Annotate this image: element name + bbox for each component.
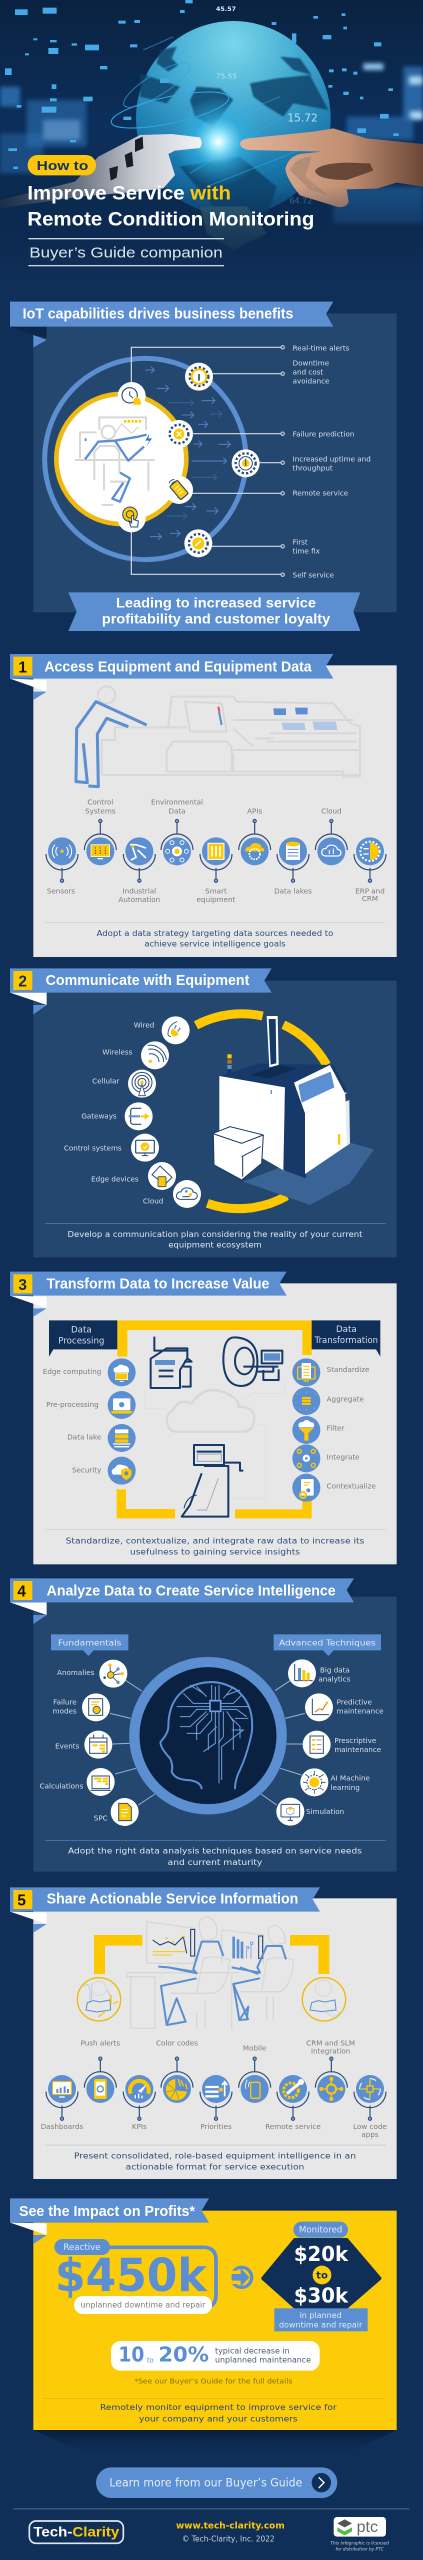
icon: data lakes	[277, 837, 309, 882]
heading	[10, 1578, 354, 1602]
left labels: Security	[72, 1466, 102, 1475]
stat: 10 to 20 percent	[111, 2341, 320, 2371]
yellow brackets	[94, 1935, 329, 1974]
caption: Develop a communication plan considering the reality of your current	[67, 1229, 363, 1239]
caption: Present consolidated, role-based equipment intelligence in an	[74, 2150, 356, 2160]
stat: 10 to 20 percent: to	[147, 2356, 154, 2364]
left labels: Data lake	[67, 1433, 102, 1442]
icon: wireless	[141, 1041, 169, 1069]
caption: Adopt a data strategy targeting data sources needed to	[97, 928, 333, 938]
footer website and copyright	[176, 2522, 285, 2544]
data source labels: Control	[87, 798, 113, 807]
subtitle: Buyer’s Guide companion	[29, 245, 223, 261]
heading	[10, 1887, 320, 1912]
icon: calculations	[87, 1768, 115, 1796]
icon: self service touch	[118, 504, 146, 532]
connection labels: Wired	[134, 1021, 154, 1030]
info labels	[41, 2039, 387, 2139]
caption: Remotely monitor equipment to improve service for	[100, 2402, 337, 2412]
icon: APIs	[239, 819, 271, 865]
logo: Tech-Clarity: Tech-Clarity	[33, 2524, 120, 2540]
icon: priorities	[200, 2075, 232, 2120]
fundamentals tag: Fundamentals	[58, 1637, 121, 1647]
data source labels: Smart	[205, 887, 227, 896]
icon: uptime gear	[232, 449, 260, 477]
hero title block	[27, 155, 314, 266]
equipment machine	[213, 1016, 374, 1205]
conclusion banner	[68, 592, 360, 631]
benefit labels: time fix	[293, 546, 320, 555]
equipment illustration	[76, 686, 361, 787]
right technique labels: maintenance	[337, 1707, 384, 1716]
right labels: Filter	[327, 1423, 344, 1432]
data source labels: Data lakes	[274, 887, 312, 896]
data values: 15.72	[287, 111, 318, 124]
icon: SPC	[111, 1798, 139, 1826]
call to action button: Learn more from our Buyer’s Guide	[109, 2475, 302, 2489]
heading: 2	[18, 974, 27, 991]
icon: AI machine learning	[300, 1768, 328, 1796]
call to action button	[96, 2467, 337, 2498]
left technique labels: Events	[55, 1742, 80, 1751]
icon: first time fix gear	[184, 529, 212, 557]
benefit labels: avoidance	[293, 377, 330, 386]
data source labels: Data	[168, 806, 186, 815]
icon: wired	[162, 1016, 190, 1044]
left labels	[43, 1367, 102, 1475]
right technique labels: maintenance	[334, 1745, 382, 1754]
outer ring	[45, 358, 246, 560]
faint arrows	[167, 399, 222, 519]
icon: edge computing	[108, 1358, 136, 1386]
connection labels: Control systems	[64, 1143, 122, 1152]
how to pill	[28, 155, 96, 175]
icon: filter	[292, 1416, 320, 1444]
license note: for distribution by PTC	[335, 2546, 384, 2552]
license note: This infographic is licensed	[330, 2540, 389, 2546]
icon: events	[84, 1731, 112, 1759]
right labels: Standardize	[327, 1365, 370, 1374]
reactive cost: Reactive	[63, 2243, 101, 2253]
heading: 3	[18, 1277, 27, 1294]
icon: predictive maintenance	[305, 1693, 333, 1721]
advanced techniques tag	[274, 1634, 381, 1656]
icon: remote service phone	[165, 476, 193, 504]
icon: dashboards	[46, 2075, 78, 2120]
fundamentals tag	[51, 1634, 128, 1656]
panel: section 3 transform data	[10, 1272, 397, 1564]
stat: 10 to 20 percent: typical decrease in	[215, 2347, 290, 2356]
monitored cost	[263, 2222, 379, 2331]
panel shadow	[33, 2430, 397, 2460]
heading: Access Equipment and Equipment Data	[44, 660, 312, 676]
icon: ERP and CRM	[354, 837, 386, 882]
connection labels: Gateways	[81, 1111, 117, 1120]
mobile hand bubble	[302, 1978, 346, 2021]
monitored cost: Monitored	[299, 2225, 342, 2235]
icon: sensors	[46, 837, 78, 882]
icon: anomalies	[99, 1660, 127, 1688]
info labels: integration	[311, 2046, 350, 2055]
data values: 75.55	[216, 71, 237, 80]
main title: Remote Condition Monitoring	[27, 210, 314, 231]
monitored cost: $30k	[294, 2283, 349, 2307]
benefit labels: throughput	[293, 463, 333, 472]
heading: 5	[17, 1892, 26, 1909]
benefit labels: Self service	[293, 570, 335, 579]
heading	[10, 654, 333, 679]
monitored cost: downtime and repair	[279, 2321, 363, 2330]
left technique labels	[40, 1668, 108, 1823]
monitored cost: $20k	[294, 2242, 349, 2266]
right labels: Integrate	[327, 1453, 360, 1462]
benefit labels	[293, 343, 371, 579]
data transformation label: Transformation	[314, 1336, 378, 1346]
panel: section 4 analyze data	[10, 1578, 397, 1872]
icon: control systems	[84, 819, 116, 865]
info labels: apps	[361, 2130, 379, 2139]
panel: section 5 share information	[10, 1887, 397, 2179]
main title: Improve Service with	[27, 183, 231, 204]
left technique labels: Calculations	[40, 1782, 84, 1791]
panel: section 1 access equipment	[10, 654, 397, 957]
icon: downtime gear	[185, 363, 213, 391]
icon: mobile	[239, 2057, 271, 2103]
caption: actionable format for service execution	[126, 2162, 304, 2172]
icon: smart equipment	[200, 837, 232, 882]
info labels: Dashboards	[41, 2122, 84, 2131]
right technique labels: Simulation	[306, 1807, 344, 1816]
stat: 10 to 20 percent: 20%	[158, 2343, 209, 2367]
heading: IoT capabilities drives business benefits	[23, 307, 293, 323]
data source labels: Automation	[118, 895, 160, 904]
icon: simulation	[276, 1798, 304, 1826]
benefit labels: and cost	[293, 368, 323, 377]
how to pill: How to	[37, 159, 89, 173]
caption	[68, 1846, 362, 1867]
data source labels: CRM	[362, 894, 378, 903]
left labels: Edge computing	[43, 1367, 101, 1376]
heading: Share Actionable Service Information	[47, 1892, 298, 1908]
left technique labels: Failure	[53, 1698, 77, 1707]
caption	[66, 1535, 364, 1557]
footnote: *See our Buyer’s Guide for the full details	[134, 2376, 293, 2385]
yellow frame	[117, 1320, 312, 1518]
caption: Adopt the right data analysis techniques based on service needs	[68, 1846, 362, 1856]
icon: environmental data	[161, 819, 193, 865]
data source labels: Industrial	[123, 887, 156, 896]
heading: 1	[18, 659, 27, 676]
right labels: Contextualize	[327, 1482, 376, 1491]
benefit labels: Downtime	[293, 359, 330, 368]
left technique labels: SPC	[94, 1814, 108, 1823]
heading	[10, 2198, 209, 2223]
data source labels	[47, 798, 385, 904]
benefit labels: First	[293, 537, 308, 546]
icon: prescriptive maintenance	[303, 1731, 331, 1759]
icon: push alerts	[84, 2057, 116, 2103]
data transformation label	[312, 1320, 380, 1357]
icon: pre-processing	[108, 1391, 136, 1419]
connection labels: Cloud	[143, 1197, 163, 1206]
icon: cellular	[128, 1070, 156, 1098]
panel: IoT capabilities	[10, 302, 397, 631]
data processing label: Processing	[58, 1336, 104, 1346]
right labels: Aggregate	[327, 1394, 365, 1403]
info labels: Push alerts	[81, 2039, 120, 2048]
license note	[330, 2540, 389, 2552]
caption	[100, 2402, 337, 2423]
caption: achieve service intelligence goals	[144, 939, 286, 949]
info labels: KPIs	[132, 2122, 147, 2131]
data source labels: Sensors	[47, 887, 75, 896]
data source labels: equipment	[197, 895, 236, 904]
heading: See the Impact on Profits*	[19, 2204, 195, 2220]
connection labels: Edge devices	[91, 1174, 139, 1183]
conclusion banner: profitability and customer loyalty	[102, 610, 330, 626]
heading	[10, 1272, 287, 1296]
heading: Analyze Data to Create Service Intelligence	[47, 1583, 336, 1599]
data source labels: Cloud	[321, 806, 342, 815]
data processing label	[49, 1320, 117, 1357]
icon: low code apps	[354, 2075, 386, 2120]
icon: security	[108, 1457, 136, 1485]
caption: Standardize, contextualize, and integrate raw data to increase its	[66, 1535, 364, 1545]
connection labels	[64, 1021, 163, 1206]
right technique labels	[306, 1666, 384, 1816]
data source labels: Systems	[85, 806, 116, 815]
info labels: Priorities	[200, 2122, 232, 2131]
icon: data lake	[108, 1424, 136, 1452]
icon: failure prediction gear	[165, 420, 193, 448]
left labels: Pre-processing	[46, 1400, 99, 1409]
data source icons row	[46, 819, 386, 882]
reactive cost: $450k	[55, 2249, 208, 2302]
conclusion banner: Leading to increased service	[116, 594, 316, 610]
icon: industrial automation	[123, 837, 155, 882]
heading: Communicate with Equipment	[46, 973, 249, 989]
caption	[74, 2150, 356, 2172]
icon: real-time alerts	[118, 382, 146, 410]
heading: 4	[17, 1583, 26, 1600]
benefit labels: Failure prediction	[293, 430, 354, 439]
arrows	[145, 367, 230, 540]
info labels: Mobile	[243, 2044, 267, 2053]
logo: ptc: ptc	[357, 2519, 378, 2536]
panel: impact on profits	[10, 2198, 409, 2552]
caption: usefulness to gaining service insights	[130, 1547, 300, 1557]
footer website and copyright: www.tech-clarity.com	[176, 2522, 285, 2532]
right technique labels: Predictive	[337, 1698, 373, 1707]
push alert hand bubble	[77, 1978, 121, 2021]
panel: section 2 communicate	[10, 968, 397, 1257]
icon: big data analytics	[288, 1659, 316, 1687]
benefit connector lines	[131, 346, 284, 576]
monitored cost: in planned	[300, 2311, 342, 2320]
right technique labels: analytics	[318, 1675, 351, 1684]
heading	[10, 968, 272, 993]
left technique labels: Anomalies	[57, 1668, 95, 1677]
icon: gateways	[125, 1102, 153, 1130]
icon: control systems	[131, 1134, 159, 1162]
icon: integrate	[292, 1444, 320, 1472]
icon: standardize	[292, 1358, 320, 1386]
workers at desks illustration	[127, 1917, 293, 2030]
info icons row	[46, 2057, 386, 2120]
right technique labels: Prescriptive	[334, 1736, 377, 1745]
icon: cloud	[173, 1180, 201, 1208]
footer website and copyright: © Tech-Clarity, Inc. 2022	[182, 2535, 275, 2544]
icon: KPIs	[123, 2075, 155, 2120]
right labels	[327, 1365, 376, 1491]
central illustration	[145, 1337, 285, 1517]
data values: 45.57	[216, 6, 236, 13]
icon: CRM and SLM integration	[315, 2057, 347, 2103]
yellow arc	[196, 1014, 327, 1209]
info labels: Remote service	[265, 2122, 321, 2131]
right technique labels: AI Machine	[331, 1774, 370, 1783]
heading	[10, 302, 333, 327]
icon: edge devices	[148, 1162, 176, 1190]
hero image: robot and human hand over globe	[0, 0, 423, 283]
reactive cost: unplanned downtime and repair	[81, 2300, 206, 2310]
benefit labels: Increased uptime and	[293, 454, 371, 463]
icon: cloud	[315, 819, 347, 865]
data source labels: ERP and	[355, 887, 385, 896]
caption: and current maturity	[168, 1857, 262, 1867]
benefit labels: Remote service	[293, 489, 349, 498]
advanced techniques tag: Advanced Techniques	[279, 1637, 376, 1647]
connection labels: Cellular	[92, 1077, 119, 1086]
central worker illustration	[56, 394, 186, 524]
data values	[216, 6, 318, 205]
caption: your company and your customers	[139, 2413, 298, 2423]
icon: failure modes	[82, 1693, 110, 1721]
data processing label: Data	[71, 1325, 92, 1335]
data transformation label: Data	[336, 1325, 357, 1335]
benefit labels: Real-time alerts	[293, 343, 350, 352]
right technique labels: Big data	[320, 1666, 350, 1675]
info labels: Color codes	[156, 2039, 198, 2048]
icon: contextualize	[292, 1474, 320, 1502]
caption: equipment ecosystem	[168, 1240, 262, 1250]
heading: Transform Data to Increase Value	[47, 1276, 269, 1292]
left technique labels: modes	[53, 1707, 77, 1716]
data values: 64.72	[289, 196, 312, 205]
icon: remote service	[277, 2075, 309, 2120]
connection labels: Wireless	[102, 1047, 133, 1056]
data source labels: APIs	[247, 806, 262, 815]
main title	[27, 183, 314, 231]
reactive cost	[54, 2239, 216, 2314]
monitored cost: to	[316, 2271, 328, 2282]
info labels: Low code	[353, 2122, 387, 2131]
brain circuit head	[134, 1662, 282, 1809]
info labels: CRM and SLM	[306, 2039, 355, 2048]
stat: 10 to 20 percent: 10	[118, 2343, 144, 2367]
right technique labels: learning	[331, 1783, 360, 1792]
icon: arrow	[229, 2267, 252, 2287]
stat: 10 to 20 percent: unplanned maintenance	[215, 2356, 311, 2365]
caption	[97, 928, 333, 949]
icon: aggregate	[292, 1387, 320, 1415]
icon: color codes	[161, 2057, 193, 2103]
caption	[67, 1229, 363, 1250]
logo: Tech-Clarity	[29, 2521, 123, 2543]
logo: ptc	[334, 2517, 386, 2537]
connector lines	[110, 1680, 305, 1805]
data source labels: Environmental	[151, 798, 203, 807]
